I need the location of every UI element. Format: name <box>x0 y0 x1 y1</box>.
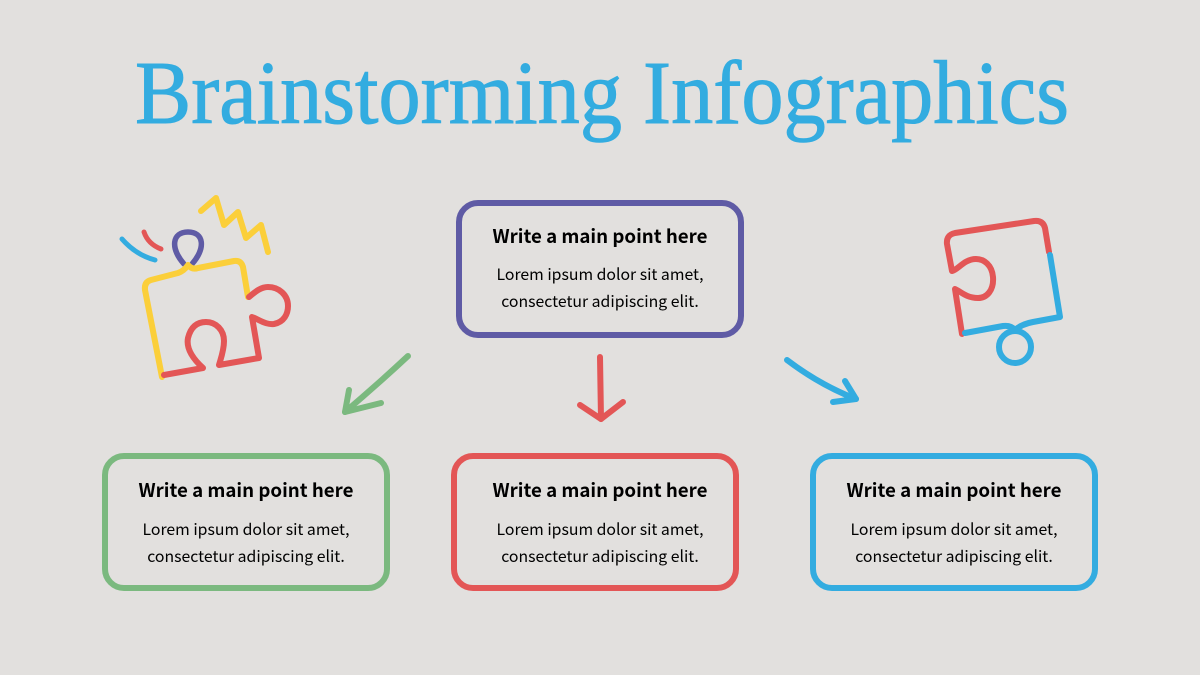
text: blue box: consectetur adipiscing elit. <box>855 544 1053 567</box>
heading: top box: Write a main point here <box>493 222 707 249</box>
heading: blue box: Write a main point here <box>847 476 1061 503</box>
text: top box: consectetur adipiscing elit. <box>501 289 699 312</box>
text: red box <box>496 517 704 567</box>
box: green main point <box>102 453 390 591</box>
icon: purple knob <box>175 232 201 264</box>
icon: red spark arc <box>144 232 161 249</box>
icon: yellow puzzle edge <box>145 261 248 377</box>
heading: green box: Write a main point here <box>139 476 353 503</box>
text: red box: consectetur adipiscing elit. <box>501 544 699 567</box>
text: green box: consectetur adipiscing elit. <box>147 544 345 567</box>
text: blue box <box>850 517 1058 567</box>
text: top box <box>496 262 704 312</box>
box: top main point <box>456 200 744 338</box>
icon: red puzzle edge <box>164 287 288 375</box>
text: red box: Lorem ipsum dolor sit amet, <box>496 517 704 540</box>
icon: blue puzzle edge and knob <box>965 255 1060 363</box>
box: red main point <box>451 453 739 591</box>
text: green box <box>142 517 350 567</box>
text: top box: Lorem ipsum dolor sit amet, <box>496 262 704 285</box>
text: blue box: Lorem ipsum dolor sit amet, <box>850 517 1058 540</box>
icon: cyan spark arc <box>122 239 155 260</box>
heading: red box: Write a main point here <box>493 476 707 503</box>
icon: yellow zigzag <box>201 198 268 252</box>
text: green box: Lorem ipsum dolor sit amet, <box>142 517 350 540</box>
title: Brainstorming Infographics <box>135 44 1069 143</box>
icon: red puzzle edge <box>947 221 1049 334</box>
box: blue main point <box>810 453 1098 591</box>
